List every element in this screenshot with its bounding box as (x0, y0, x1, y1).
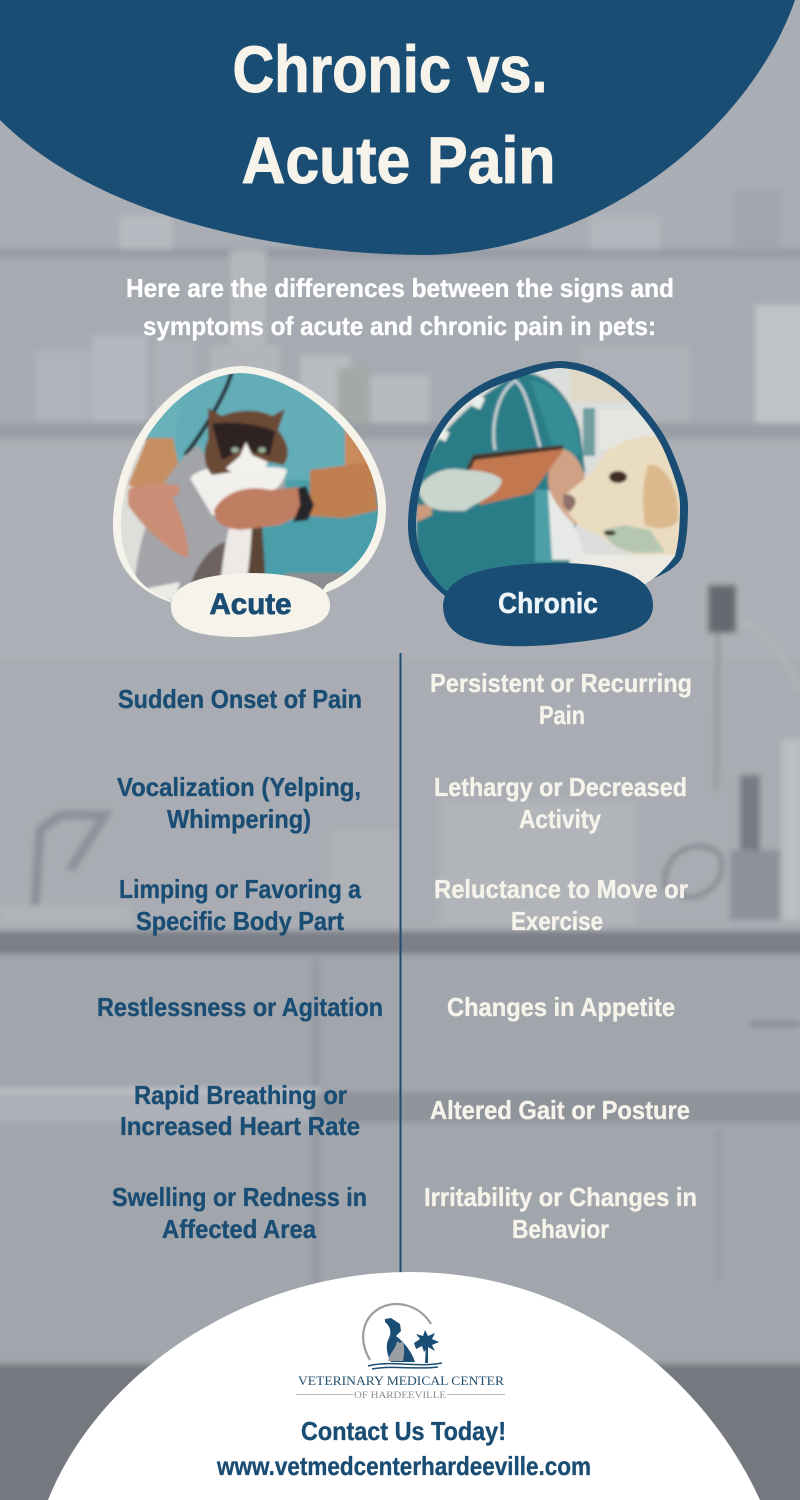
list: acute signs: Whimpering) (167, 804, 311, 834)
list: acute signs: Sudden Onset of Pain (118, 684, 362, 714)
footer panel (48, 1272, 760, 1500)
list: chronic signs: Irritability or Changes in (424, 1182, 697, 1212)
list: acute signs: Swelling or Redness in (112, 1182, 367, 1212)
list: chronic signs: Behavior (512, 1214, 609, 1244)
list: acute signs: Limping or Favoring a (119, 874, 361, 904)
panel: acute photo (110, 360, 390, 637)
list: chronic signs: Exercise (511, 906, 603, 936)
logo: VETERINARY MEDICAL CENTER (298, 1373, 504, 1388)
list: chronic signs: Changes in Appetite (447, 992, 675, 1022)
list: chronic signs: Pain (539, 700, 585, 730)
label: Acute: Acute (210, 588, 292, 621)
list: acute signs: Restlessness or Agitation (97, 992, 383, 1022)
logo (296, 1304, 505, 1401)
intro text: symptoms of acute and chronic pain in pets: (143, 311, 656, 341)
list: acute signs: Vocalization (Yelping, (117, 772, 361, 802)
title: Acute Pain (242, 123, 556, 197)
list: chronic signs: Persistent or Recurring (430, 668, 692, 698)
list: acute signs: Affected Area (162, 1214, 316, 1244)
list: acute signs: Rapid Breathing or (134, 1080, 347, 1110)
list: chronic signs (424, 668, 697, 1244)
label: Acute (171, 573, 330, 637)
contact text: Contact Us Today! (301, 1416, 506, 1446)
label: Chronic (443, 563, 653, 646)
title: Chronic vs. (232, 32, 548, 106)
label: Chronic: Chronic (498, 588, 598, 620)
intro text: Here are the differences between the signs and (126, 273, 674, 303)
list: chronic signs: Reluctance to Move or (434, 874, 688, 904)
panel: chronic photo (408, 360, 690, 646)
contact text: www.vetmedcenterhardeeville.com (216, 1451, 591, 1481)
list: acute signs (97, 684, 383, 1244)
title (232, 32, 556, 197)
logo: OF HARDEEVILLE (354, 1391, 446, 1401)
contact text (216, 1416, 591, 1481)
list: chronic signs: Lethargy or Decreased (434, 772, 687, 802)
list: chronic signs: Activity (519, 804, 601, 834)
list: acute signs: Increased Heart Rate (120, 1111, 360, 1141)
header: title panel (0, 0, 795, 255)
list: chronic signs: Altered Gait or Posture (430, 1095, 690, 1125)
intro text (126, 273, 674, 341)
list: acute signs: Specific Body Part (136, 906, 344, 936)
